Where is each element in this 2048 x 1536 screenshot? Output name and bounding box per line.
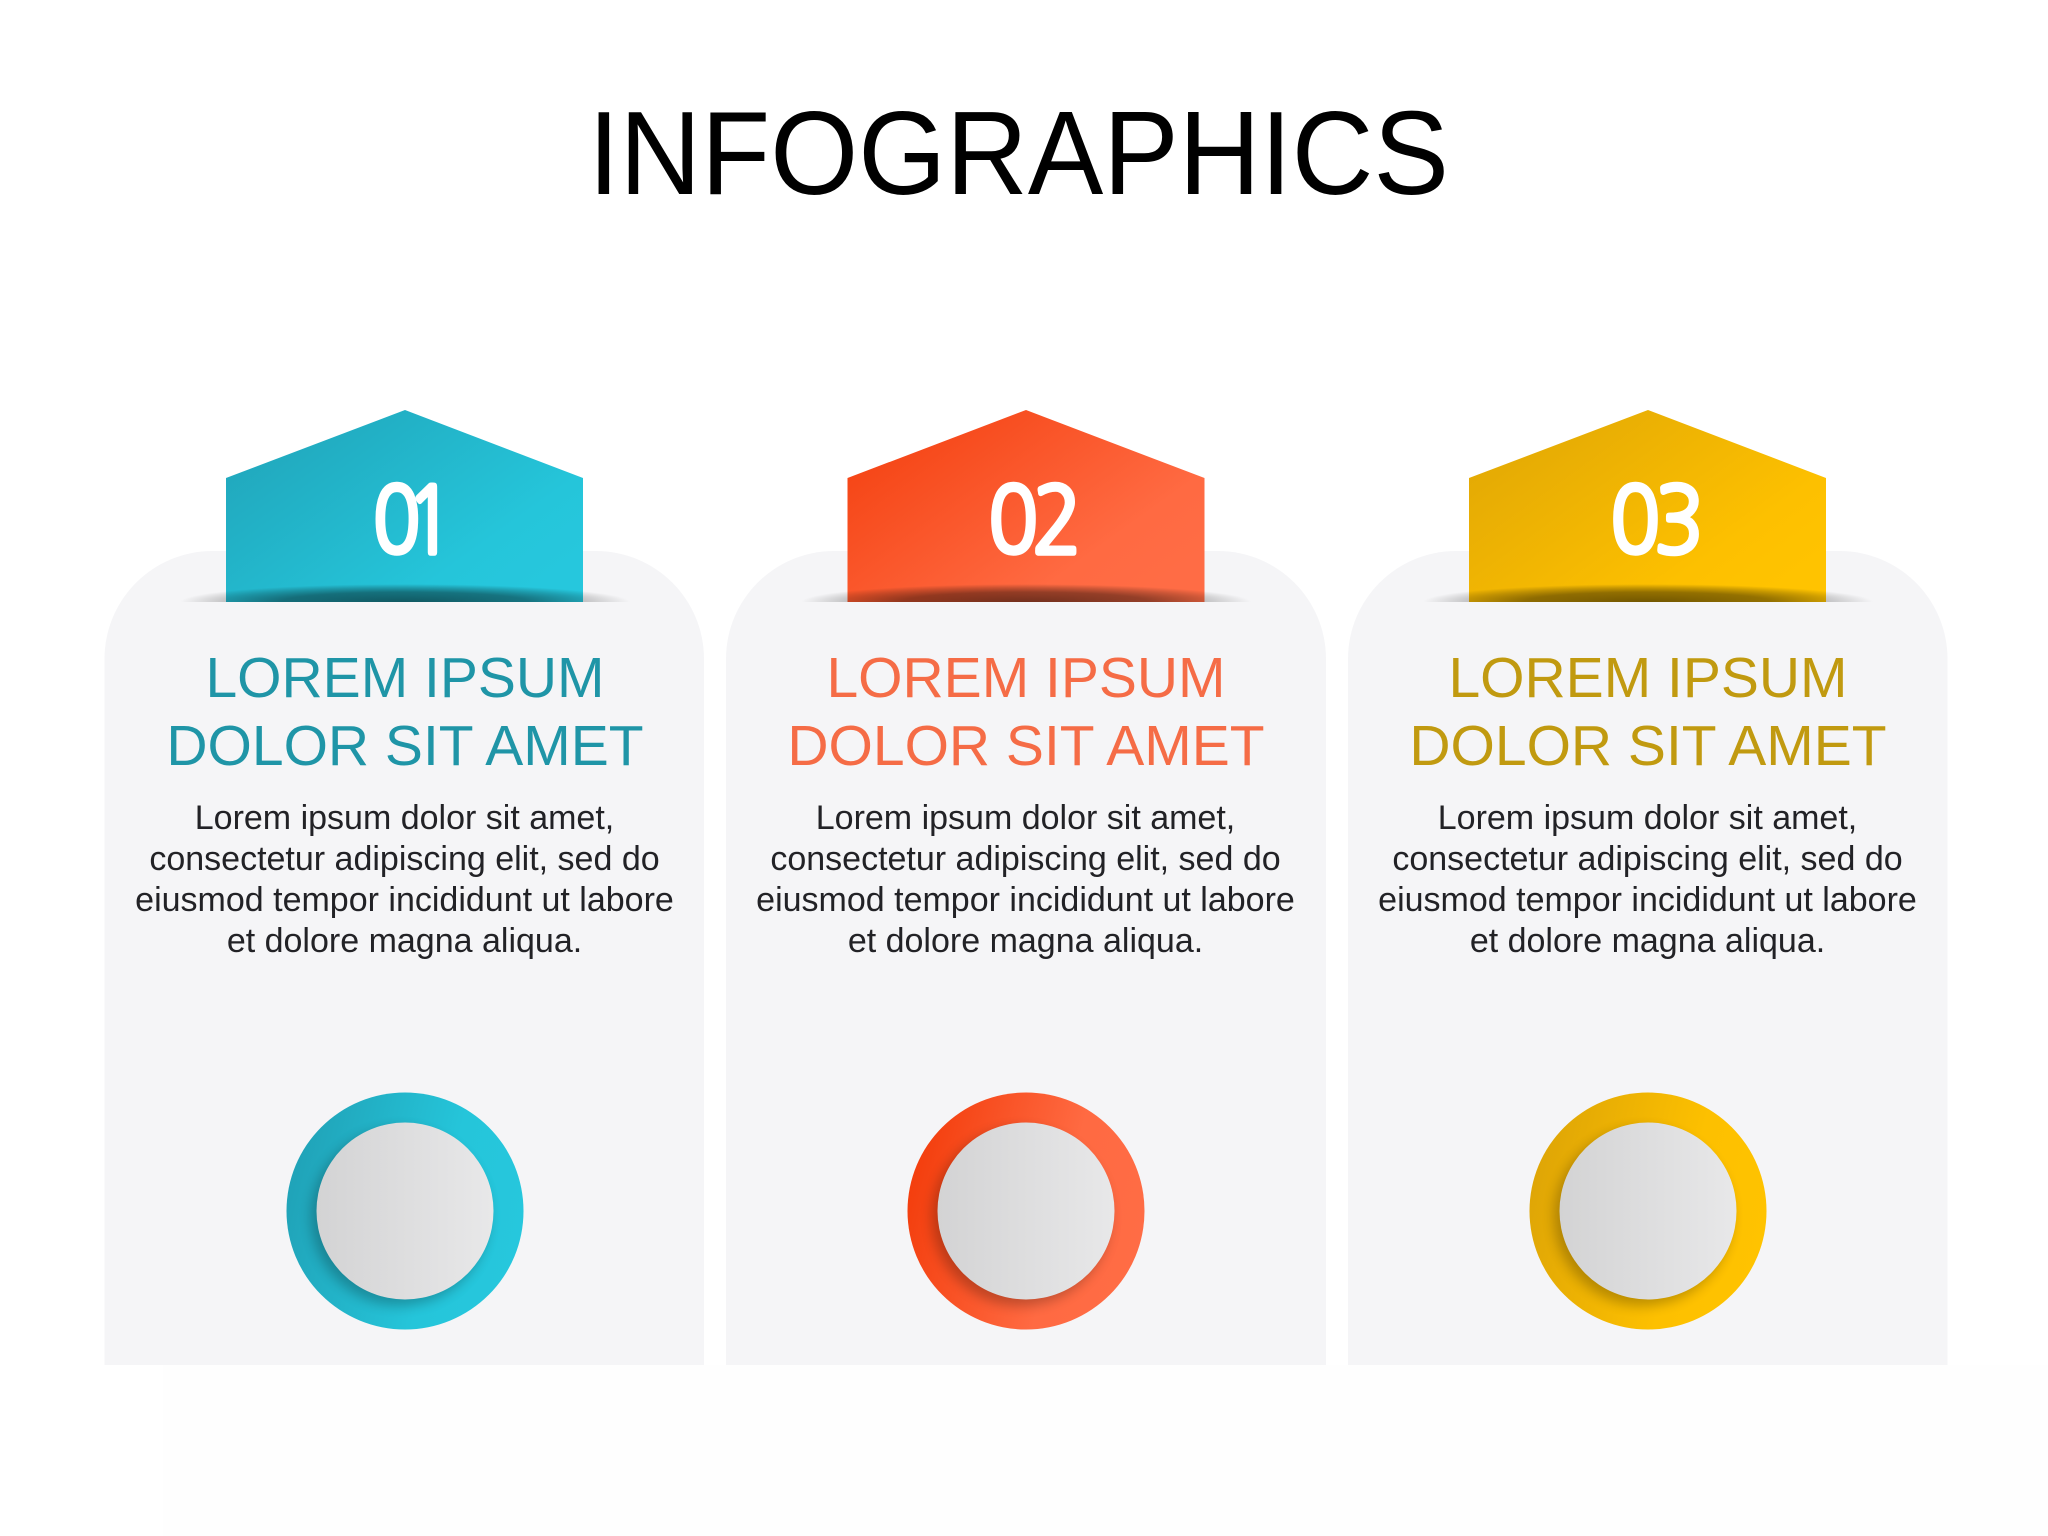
panel background <box>726 551 1326 1365</box>
body text 01: Lorem ipsum dolor sit amet, <box>195 799 614 837</box>
body text 01: eiusmod tempor incididunt ut labore <box>135 881 674 919</box>
heading 03: DOLOR SIT AMET <box>1409 714 1887 778</box>
heading 01: DOLOR SIT AMET <box>166 714 644 778</box>
number 01: 01 <box>373 476 439 567</box>
panel background <box>1348 551 1948 1365</box>
pentagon tab 02 <box>848 410 1204 602</box>
body text 02: consectetur adipiscing elit, sed do <box>770 840 1281 878</box>
pentagon tab 01 <box>226 410 583 602</box>
body text 03: Lorem ipsum dolor sit amet, <box>1438 799 1857 837</box>
body text 03: eiusmod tempor incididunt ut labore <box>1378 881 1917 919</box>
faint lower background <box>163 1365 2048 1536</box>
pocket shadow 03 <box>1431 584 1865 602</box>
circle icon 03 <box>1530 1092 1766 1330</box>
panel: step 02 <box>726 410 1326 1365</box>
circle icon 01 <box>286 1092 524 1330</box>
pocket shadow 01 <box>188 584 622 602</box>
heading 02: LOREM IPSUM <box>826 646 1226 710</box>
body text 03: et dolore magna aliqua. <box>1470 922 1825 960</box>
body text 01: et dolore magna aliqua. <box>227 922 582 960</box>
heading 01: LOREM IPSUM <box>205 646 605 710</box>
panel: step 01 <box>104 410 704 1365</box>
pentagon tab 03 <box>1469 410 1826 602</box>
title: INFOGRAPHICS <box>588 86 1449 220</box>
body text 02: Lorem ipsum dolor sit amet, <box>816 799 1235 837</box>
number 03: 03 <box>1610 474 1698 567</box>
heading 03: LOREM IPSUM <box>1448 646 1848 710</box>
panel background <box>104 551 704 1365</box>
number 02: 02 <box>988 474 1076 567</box>
body text 02: et dolore magna aliqua. <box>848 922 1203 960</box>
body text 02: eiusmod tempor incididunt ut labore <box>756 881 1295 919</box>
circle icon 02 <box>908 1092 1144 1330</box>
heading 02: DOLOR SIT AMET <box>787 714 1265 778</box>
body text 01: consectetur adipiscing elit, sed do <box>149 840 660 878</box>
pocket shadow 02 <box>809 584 1243 602</box>
body text 03: consectetur adipiscing elit, sed do <box>1392 840 1903 878</box>
panel: step 03 <box>1348 410 1948 1365</box>
